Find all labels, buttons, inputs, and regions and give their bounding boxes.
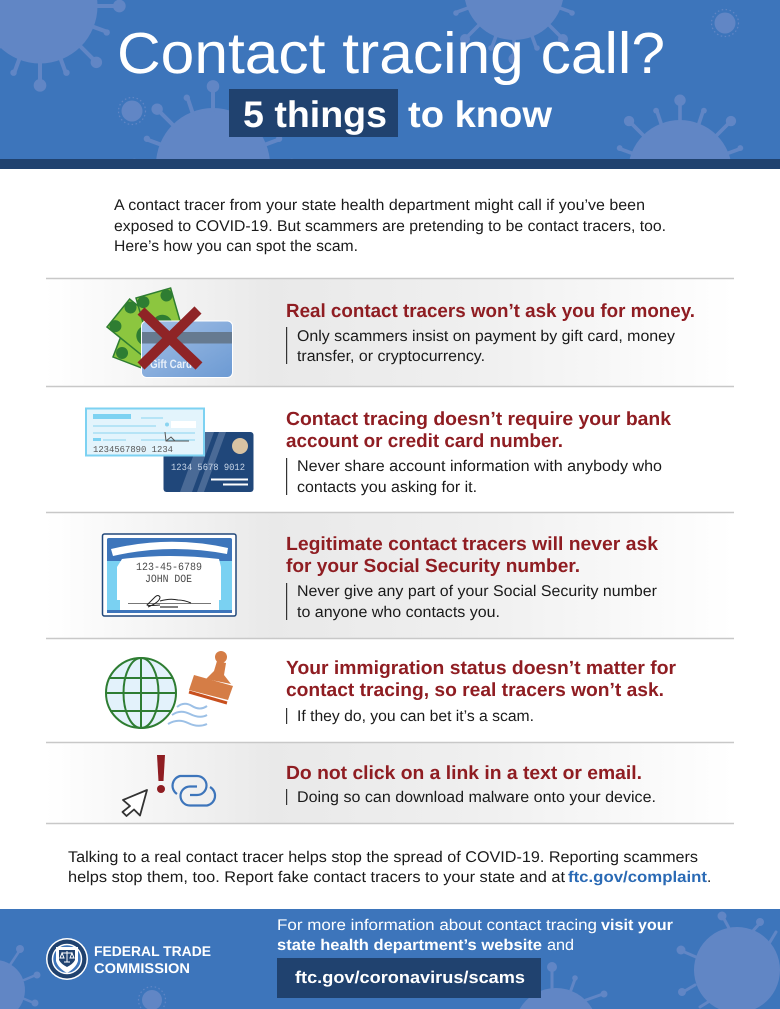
intro text: A contact tracer from your state health department might call if you’ve been [114, 197, 645, 214]
heading: for your Social Security number. [286, 556, 580, 577]
heading: Do not click on a link in a text or email. [286, 763, 642, 784]
footer banner [0, 909, 780, 1009]
footer text: state health department’s website [277, 937, 542, 954]
heading [286, 409, 671, 452]
subtitle: 5 things [243, 94, 387, 135]
description: Never give any part of your Social Security number [297, 583, 657, 600]
intro text: exposed to COVID-19. But scammers are pretending to be contact tracers, too. [114, 218, 666, 235]
header banner [0, 0, 780, 169]
heading [286, 534, 658, 577]
icon: social security card: JOHN DOE [145, 574, 192, 586]
description [286, 327, 675, 365]
footer text: For more information about contact tracing [277, 917, 597, 934]
panel: social security [102, 534, 658, 621]
FTC name: COMMISSION [94, 960, 190, 976]
row backgrounds [46, 278, 734, 824]
description: contacts you asking for it. [297, 479, 477, 496]
icon: social security card [102, 534, 236, 616]
heading [286, 658, 677, 701]
panel: immigration [106, 651, 677, 728]
icon: cash, gift card and red X: Gift Card [150, 357, 192, 371]
closing text [68, 849, 711, 886]
description: Only scammers insist on payment by gift card, money [297, 328, 675, 345]
footer link box [277, 958, 541, 998]
title: Contact tracing call? [117, 21, 665, 86]
heading: account or credit card number. [286, 431, 563, 452]
intro text: Here’s how you can spot the scam. [114, 238, 358, 255]
icon: social security card: 123-45-6789 [136, 562, 202, 574]
subtitle: to know [408, 94, 552, 135]
heading: contact tracing, so real tracers won’t ask. [286, 680, 664, 701]
description: transfer, or cryptocurrency. [297, 348, 485, 365]
FTC name: FEDERAL TRADE [94, 943, 211, 959]
footer text [277, 917, 673, 954]
icon: globe, stamp and waves [106, 651, 233, 728]
header virus decorations [0, 0, 744, 159]
description: Never share account information with anybody who [297, 458, 662, 475]
panel: money [107, 288, 695, 378]
icon: check and credit card [86, 408, 254, 492]
footer text: and [547, 937, 574, 954]
description [286, 458, 662, 496]
panel: bank account [86, 408, 671, 496]
icon: check and credit card: 1234 5678 9012 [171, 462, 245, 473]
panel: links [122, 755, 656, 816]
description: to anyone who contacts you. [297, 604, 500, 621]
intro text [114, 197, 666, 255]
footer link box: ftc.gov/coronavirus/scams [295, 968, 525, 987]
FTC seal [46, 938, 88, 980]
description: Doing so can download malware onto your device. [297, 789, 656, 806]
closing text: Talking to a real contact tracer helps stop the spread of COVID-19. Reporting scammers [68, 849, 698, 866]
heading: Real contact tracers won’t ask you for money. [286, 301, 695, 322]
icon: check and credit card: 1234567890 1234 [93, 445, 173, 455]
subtitle [229, 89, 552, 137]
heading: Your immigration status doesn’t matter for [286, 658, 677, 679]
footer text: visit your [601, 917, 673, 934]
closing text: ftc.gov/complaint [568, 869, 707, 886]
FTC name [94, 943, 211, 976]
heading: Contact tracing doesn’t require your bank [286, 409, 671, 430]
icon: cash, gift card and red X [107, 288, 232, 378]
heading: Legitimate contact tracers will never ask [286, 534, 658, 555]
closing text: . [707, 869, 711, 886]
icon: alert, cursor and link [122, 755, 215, 816]
footer virus decorations [0, 912, 780, 1009]
closing text: helps stop them, too. Report fake contact tracers to your state and at [68, 869, 566, 886]
description [286, 583, 657, 621]
description: If they do, you can bet it’s a scam. [297, 708, 534, 725]
